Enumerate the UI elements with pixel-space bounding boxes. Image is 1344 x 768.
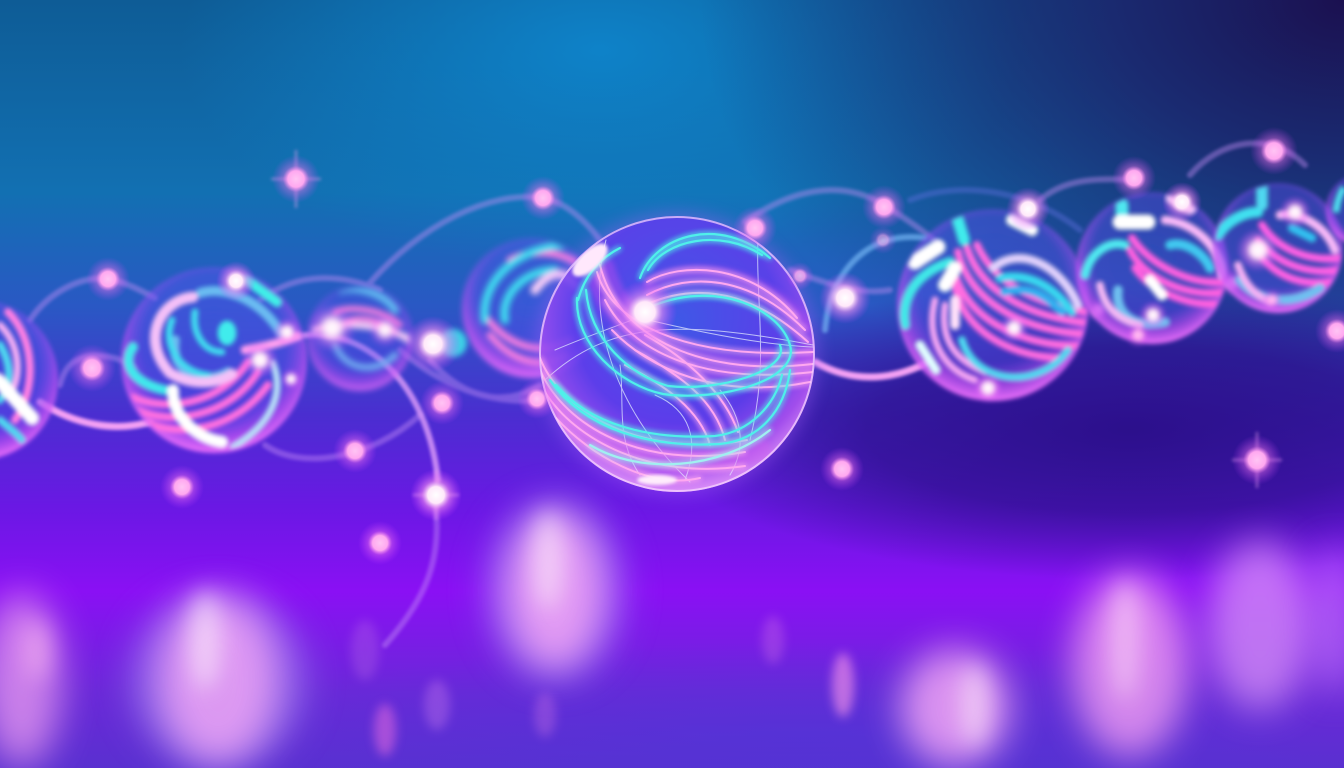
sphere: right group 1 bbox=[897, 209, 1110, 403]
sphere strands bbox=[540, 234, 813, 485]
pink strand bundles bbox=[540, 265, 813, 480]
cyan strand bundles bbox=[550, 234, 791, 464]
sphere: left large bbox=[121, 267, 307, 453]
highlights on glass bbox=[570, 241, 610, 279]
sphere: right group 2 bbox=[1076, 192, 1245, 348]
connecting light strands bbox=[30, 143, 1305, 645]
glowing light points bbox=[68, 127, 1344, 565]
sphere: behind main, left bbox=[462, 238, 602, 378]
sphere: far left bbox=[0, 300, 58, 460]
magenta wash behind bundles bbox=[600, 270, 810, 370]
reflections on the floor bbox=[0, 500, 1344, 767]
sphere: right edge bbox=[1326, 174, 1344, 246]
sphere: small blurred left bbox=[307, 285, 413, 391]
sphere: right group 3 bbox=[1213, 183, 1343, 313]
thin white wireframe lines bbox=[545, 240, 813, 482]
main glass sphere bbox=[535, 212, 819, 496]
